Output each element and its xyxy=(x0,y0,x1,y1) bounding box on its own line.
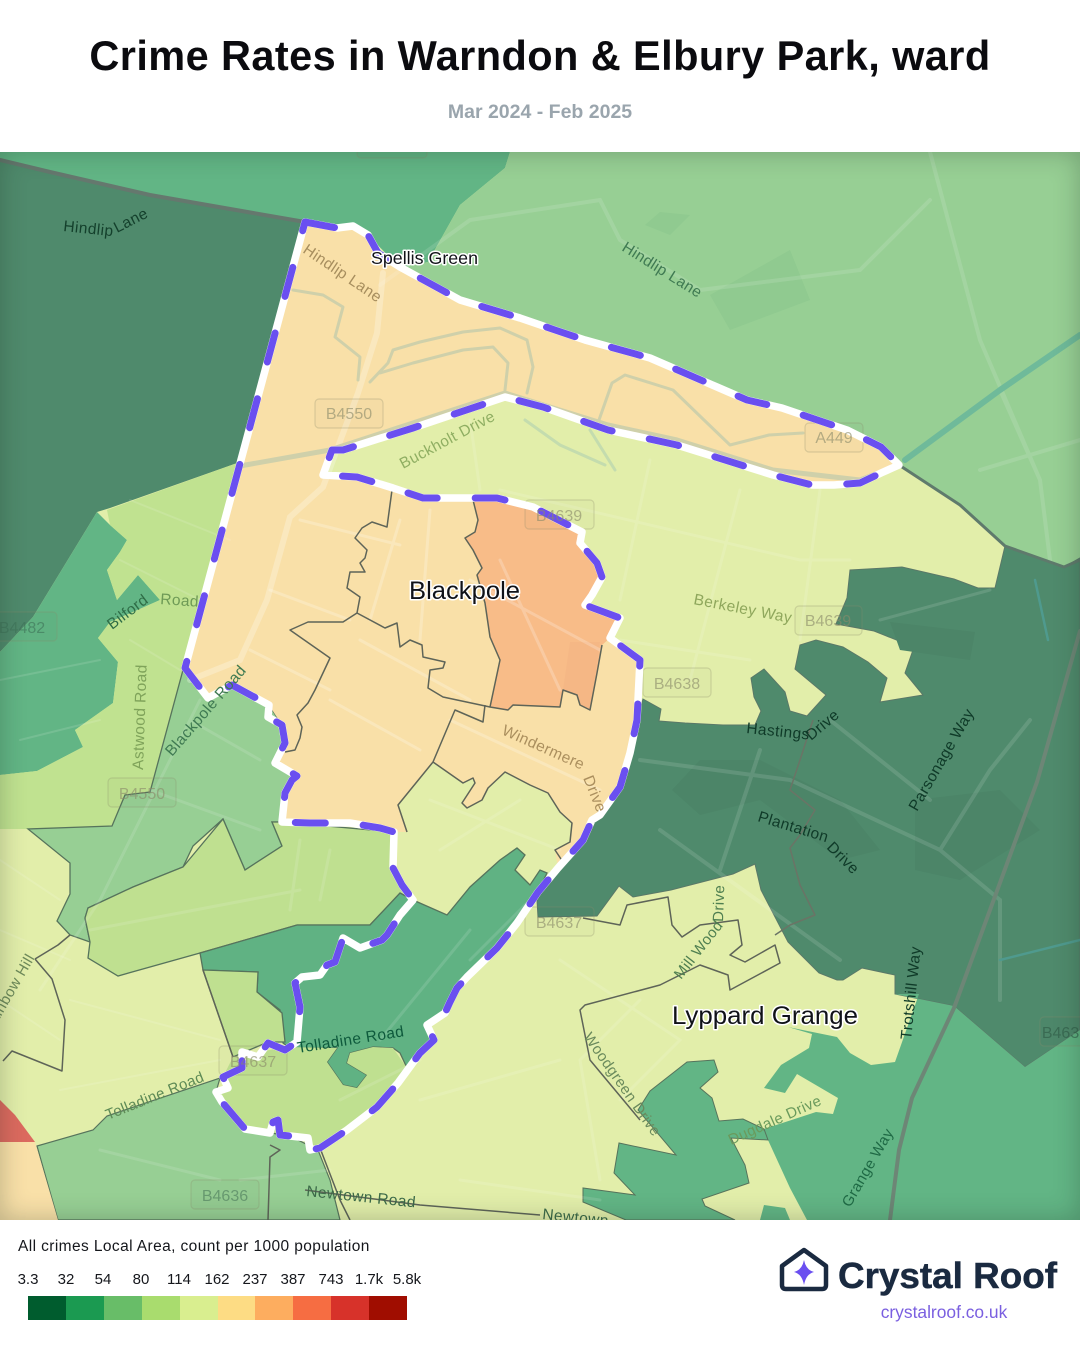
road shield labels: B4637 xyxy=(230,1054,276,1071)
place labels: Blackpole xyxy=(409,577,520,605)
place labels: Lyppard Grange xyxy=(672,1002,858,1030)
street labels: Hindlip xyxy=(63,218,114,240)
area: Tolladine bubble light green xyxy=(216,1047,407,1148)
ward boundary: purple dashes xyxy=(185,222,899,1150)
place labels: Spellis Green xyxy=(371,248,478,268)
street labels: Blackpole Road xyxy=(162,662,250,760)
subtitle: date range: Mar 2024 - Feb 2025 xyxy=(448,101,632,123)
legend scale labels: 114 xyxy=(167,1271,191,1288)
street labels: Trotshill Way xyxy=(898,946,925,1040)
road shield labels: B4550 xyxy=(119,786,165,803)
street labels: Berkeley Way xyxy=(692,591,793,627)
grey streams and rail xyxy=(240,290,899,480)
street labels: Buckholt Drive xyxy=(397,408,498,473)
legend scale labels: 80 xyxy=(133,1271,149,1288)
area: south ward mid green xyxy=(200,848,547,1088)
area: top right light green xyxy=(400,152,1080,567)
road network xyxy=(0,152,1080,1200)
street labels: Road xyxy=(160,591,199,611)
road shield labels xyxy=(0,406,1080,1205)
street labels: Drive xyxy=(823,839,862,878)
legend scale labels: 32 xyxy=(58,1271,74,1288)
road shield labels: B4639 xyxy=(805,613,851,630)
street labels: Newtown Road xyxy=(306,1183,417,1211)
street labels: Hastings xyxy=(746,720,811,744)
area: south east mid green xyxy=(764,994,1080,1220)
road shield labels: A449 xyxy=(815,430,853,447)
website: crystalroof.co.uk xyxy=(881,1302,1008,1322)
road shields xyxy=(0,140,1080,1209)
area: small mid green patch xyxy=(760,1205,790,1220)
area: west dark green xyxy=(0,160,305,652)
roads: A-road and boundary xyxy=(0,160,1080,1220)
legend scale labels: 387 xyxy=(280,1271,306,1288)
legend scale labels: 162 xyxy=(204,1271,230,1288)
street labels: Woodgreen Drive xyxy=(580,1030,664,1140)
street labels: Mill Wood xyxy=(671,917,727,982)
ward boundary: white underlay xyxy=(185,222,899,1150)
place labels xyxy=(371,248,858,1030)
legend xyxy=(18,1238,422,1320)
road shield labels: B4638 xyxy=(654,676,700,693)
area: Blackpole Road green xyxy=(28,670,297,942)
street labels: Hindlip Lane xyxy=(619,239,705,302)
legend colour ramp xyxy=(28,1296,407,1320)
area: south west green xyxy=(37,1078,340,1220)
legend scale labels: 3.3 xyxy=(18,1271,38,1288)
area: red patch xyxy=(0,1100,35,1142)
area: south west peach xyxy=(0,1142,58,1220)
area: top centre mid green xyxy=(0,152,510,268)
road shield labels: B4639 xyxy=(536,508,582,525)
street labels xyxy=(0,205,978,1230)
area: west mid green xyxy=(0,512,160,775)
road shield labels: B4482 xyxy=(0,620,45,637)
street labels: Dugdale Drive xyxy=(726,1092,824,1149)
street labels: Parsonage Way xyxy=(906,706,978,814)
road shield labels: B4550 xyxy=(326,406,372,423)
street labels: Windermere xyxy=(499,722,587,774)
area: ward north peach xyxy=(185,222,899,868)
street labels: Plantation xyxy=(756,809,831,846)
street labels: Drive xyxy=(579,773,609,815)
brand name: Crystal Roof xyxy=(838,1255,1058,1296)
street labels: Lane xyxy=(111,205,151,237)
choropleth map xyxy=(0,152,1080,1220)
street labels: Astwood Road xyxy=(130,664,151,770)
street labels: Hindlip Lane xyxy=(300,241,385,306)
street labels: Tolladine Road xyxy=(296,1023,405,1057)
title: Crime Rates in Warndon & Elbury Park, ward xyxy=(89,32,991,79)
street labels: Drive xyxy=(710,885,728,922)
street labels: Bilford xyxy=(104,591,152,633)
area: light green pocket xyxy=(203,970,285,1057)
legend scale labels: 1.7k xyxy=(355,1271,383,1288)
legend scale labels: 5.8k xyxy=(393,1271,421,1288)
legend scale labels: 743 xyxy=(318,1271,344,1288)
legend scale labels xyxy=(18,1271,422,1288)
legend scale labels: 237 xyxy=(242,1271,268,1288)
area: Astwood light green xyxy=(0,462,240,829)
road shield labels: B4637 xyxy=(536,915,582,932)
area: south mid green patch xyxy=(583,1060,768,1220)
district boundary lines xyxy=(3,490,815,1220)
legend title: All crimes Local Area, count per 1000 population xyxy=(18,1238,370,1255)
street labels: Tolladine Road xyxy=(103,1069,207,1124)
area: central light green xyxy=(85,819,413,976)
logo: Crystal Roof xyxy=(780,1248,1058,1322)
road shield labels: B4636 xyxy=(202,1188,248,1205)
area: east dark green xyxy=(537,546,1080,1067)
street labels: Drive xyxy=(803,707,843,744)
street labels: Grange Way xyxy=(839,1126,897,1210)
legend scale labels: 54 xyxy=(95,1271,111,1288)
icon: house with star xyxy=(782,1250,826,1289)
area: Blackpole orange xyxy=(465,498,620,710)
